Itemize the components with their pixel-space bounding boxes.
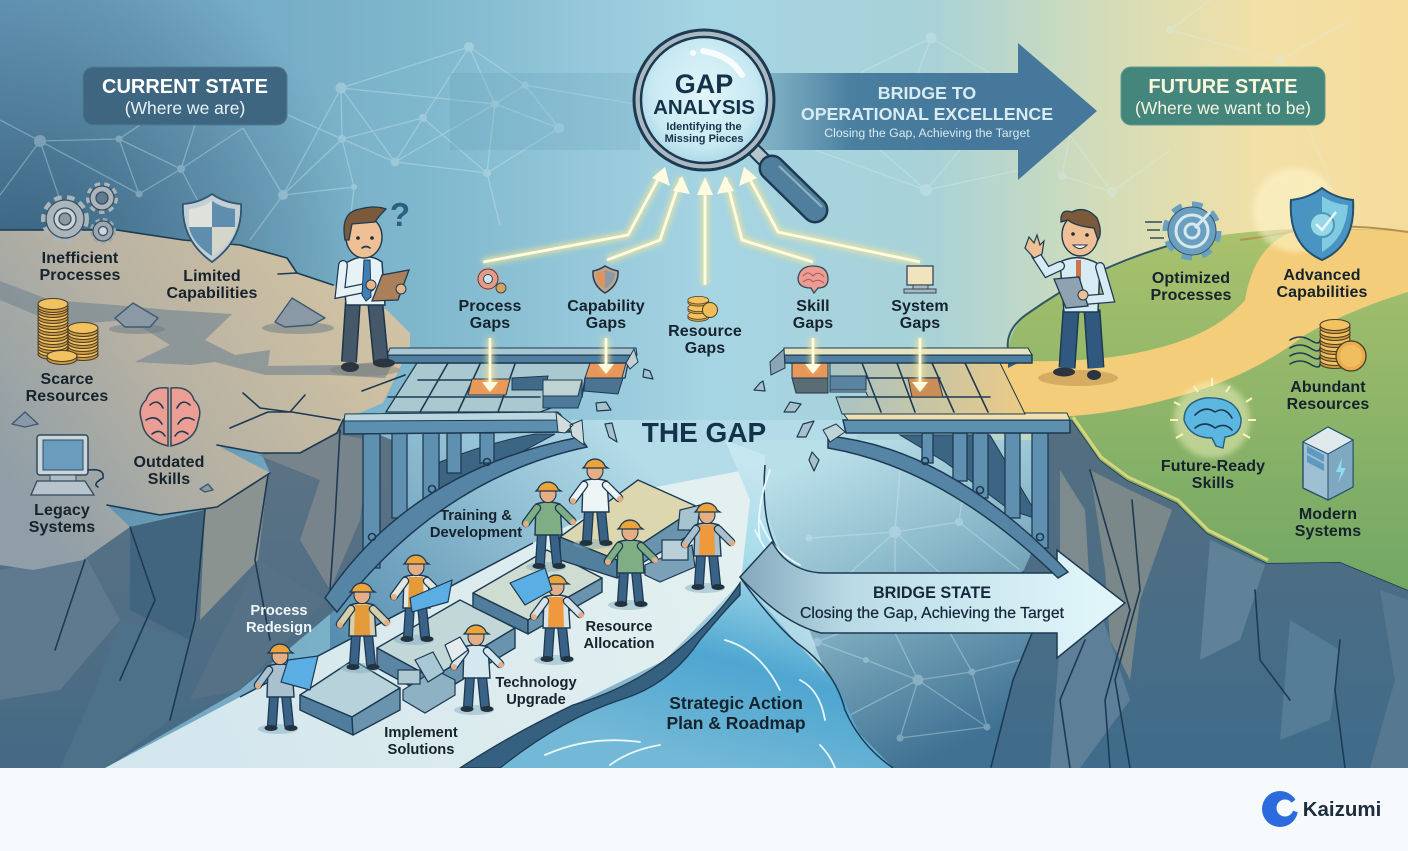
current state labels: Limited [183,268,241,285]
current state labels: Outdated [133,454,205,471]
current state labels: Skills [148,471,190,488]
magnifier text: Identifying the [666,121,742,133]
block: first slab [300,660,400,735]
worker: blue helmet [682,503,735,593]
main arrow: bridge to operational excellence: BRIDGE TO [878,83,976,103]
future state labels [1151,267,1369,540]
worker: green shirt [605,520,658,610]
gap labels: Gaps [586,315,626,332]
strategic action label: Strategic Action [669,693,803,713]
river [460,440,893,768]
current state labels: Scarce [40,371,94,388]
gap labels: Gaps [470,315,510,332]
gap icon: capability [593,266,618,293]
question mark: ? [390,196,410,233]
future state labels: Capabilities [1276,284,1368,301]
bridge state text: BRIDGE STATE [873,584,991,602]
main arrow: bridge to operational excellence: OPERATIONAL EXCELLENCE [801,104,1053,124]
worker: technology [451,625,504,715]
bridge state text: Closing the Gap, Achieving the Target [800,605,1065,622]
block: fourth slab [560,480,698,578]
current state labels: Capabilities [166,285,258,302]
action labels: Redesign [246,620,312,636]
current state labels [26,250,258,536]
action labels: Technology [495,675,577,691]
the gap heading: THE GAP [642,417,766,448]
icon: gears [45,185,115,242]
icon: optimized gear [1145,206,1217,256]
icon: abundant coins [1290,320,1366,371]
action labels: Development [430,525,522,541]
magnifier text: GAP [675,69,733,99]
magnifier text: Missing Pieces [665,133,743,145]
gap tiles [468,363,626,395]
future state labels: Resources [1287,396,1369,413]
gap icon: system computer [904,266,936,293]
handle [750,146,772,168]
main arrow: bridge to operational excellence [760,43,1097,180]
strategic action label [666,693,806,733]
icon: scarce resources coins [38,298,98,364]
action labels: Training & [440,508,512,524]
future state label: (Where we want to be) [1135,98,1311,118]
left plateau [0,230,410,570]
current state label [83,67,287,125]
blueprints [281,568,552,690]
gap labels [459,298,949,357]
person: current state [330,196,410,376]
icon: advanced shield [1291,188,1353,260]
worker: holding blueprint [391,555,444,645]
future state labels: Systems [1295,523,1361,540]
magnifier text: ANALYSIS [653,96,755,119]
gap labels: Skill [796,298,830,315]
top rail [784,355,1032,363]
future state labels: Skills [1192,475,1234,492]
walkway [105,470,760,768]
worker: white shirt [570,459,623,549]
action labels: Process [250,603,308,619]
icon: outdated skills brain [140,388,200,446]
gap icon: process [478,269,506,293]
icon: limited capabilities shield [183,194,241,262]
kaizumi logo [1262,791,1381,827]
left lower bridge: arch, posts and deck [325,412,587,612]
current state labels: Resources [26,388,108,405]
workers [255,459,735,734]
gap tiles [792,363,943,397]
right cliff rock [991,420,1408,768]
kaizumi logo: Kaizumi [1303,798,1381,821]
current state label: CURRENT STATE [102,76,268,98]
lower chasm backdrop [330,420,1060,770]
current state labels: Systems [29,519,95,536]
strategic action label: Plan & Roadmap [666,713,806,733]
worker: training, green [523,482,576,572]
block: second slab [377,600,515,698]
gap labels: Capability [567,298,645,315]
right land with green and sand path [995,168,1408,590]
gap labels: Gaps [900,315,940,332]
gap labels: Process [459,298,521,315]
construction blocks [300,480,700,735]
gap labels: Gaps [793,315,833,332]
action labels [246,508,655,758]
future state labels: Future-Ready [1161,458,1265,475]
debris fragments [596,369,819,471]
future state labels: Abundant [1290,379,1366,396]
future state label [1121,67,1325,125]
action labels: Implement [384,725,458,741]
worker: with drill [337,583,390,673]
gap labels: Gaps [685,340,725,357]
icon: modern server [1303,427,1353,500]
top arrow: faint band behind magnifier [450,73,640,150]
future state labels: Modern [1299,506,1357,523]
gap labels: Resource [668,323,742,340]
magnifying glass [634,30,822,210]
future state labels: Processes [1151,287,1231,304]
future state labels: Advanced [1283,267,1361,284]
top rail [387,355,636,363]
machine [398,652,455,713]
gap icon: resource coins [688,296,718,321]
current state label: (Where we are) [125,98,245,118]
left upper bridge deck with gaps [386,348,638,412]
rocks [12,298,334,492]
worker: process redesign [255,644,308,734]
person: future state [1025,210,1118,386]
icon: future-ready brain [1170,378,1256,458]
action labels: Upgrade [506,692,566,708]
bridge state arrow [740,542,1125,658]
glowing yellow arrows [482,167,928,392]
current state labels: Processes [40,267,120,284]
machine 2 [645,505,700,582]
right upper bridge deck with gaps [770,348,1032,414]
current state labels: Inefficient [42,250,119,267]
left cliff rock [0,420,396,768]
magnifier text [653,69,755,145]
future state label: FUTURE STATE [1148,76,1298,98]
gap labels: System [891,298,949,315]
bridge state text [800,584,1065,622]
worker: resource allocation [531,575,584,665]
action labels: Resource [586,619,652,635]
action labels: Allocation [584,636,655,652]
gap icon: skill brain [798,266,828,293]
network pattern [0,0,1350,240]
current state labels: Legacy [34,502,90,519]
main arrow: bridge to operational excellence: Closing the Gap, Achieving the Target [824,126,1030,140]
action labels: Solutions [388,742,454,758]
right lower bridge: arch, posts and deck [823,413,1070,578]
future state labels: Optimized [1152,270,1230,287]
icon: legacy computer [31,435,103,495]
block: third slab [473,550,602,634]
footer bar [0,768,1408,851]
